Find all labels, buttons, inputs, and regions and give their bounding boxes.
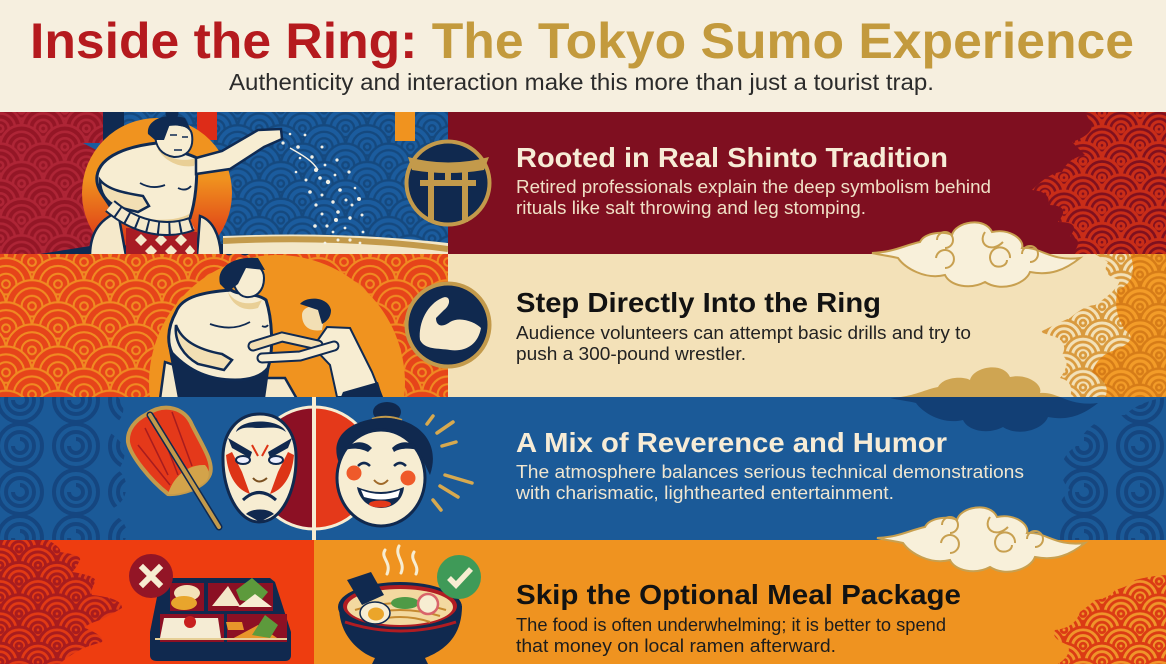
- subtitle: Authenticity and interaction make this more than just a tourist trap.: [229, 69, 934, 95]
- icon: laughing wrestler: [336, 402, 433, 526]
- icon: bento box: [150, 578, 291, 661]
- salt particles: [281, 133, 364, 244]
- icon: flexed bicep: [406, 284, 490, 366]
- text: step into the ring: [516, 322, 971, 364]
- icon: ramen bowl: [338, 572, 462, 664]
- panel: Shinto tradition: [0, 112, 1166, 254]
- heading: Shinto tradition: Rooted in Real Shinto Tradition: [516, 142, 948, 173]
- text: Shinto tradition: [516, 176, 991, 218]
- text: reverence and humor: with charismatic, lighthearted entertainment.: [515, 482, 894, 503]
- icon: laughter lines: [427, 416, 472, 510]
- text: skip the meal package: [516, 614, 946, 656]
- panel: reverence and humor: [0, 397, 1166, 540]
- text: step into the ring: Audience volunteers can attempt basic drills and try to: [516, 322, 971, 343]
- icon: kabuki mask: [223, 414, 296, 522]
- illustration: volunteer pushing sumo wrestler: [149, 254, 405, 397]
- icon: war fan: [128, 408, 219, 527]
- heading: reverence and humor: A Mix of Reverence and Humor: [516, 427, 947, 458]
- text: reverence and humor: [515, 461, 1024, 503]
- heading: skip the meal package: Skip the Optional Meal Package: [516, 579, 961, 610]
- header background: [0, 0, 1166, 112]
- icon: check badge: [437, 555, 481, 599]
- half circle backdrop: [253, 397, 375, 540]
- text: reverence and humor: The atmosphere balances serious technical demonstrations: [516, 461, 1024, 482]
- title: Inside the Ring: The Tokyo Sumo Experience: [30, 13, 1134, 69]
- text: skip the meal package: The food is often underwhelming; it is better to spend: [516, 614, 946, 635]
- text: Shinto tradition: rituals like salt throwing and leg stomping.: [516, 197, 866, 218]
- text: skip the meal package: that money on local ramen afterward.: [516, 635, 836, 656]
- cloud: cream, rows one and two: [872, 222, 1080, 287]
- heading: step into the ring: Step Directly Into the Ring: [516, 287, 881, 318]
- panel: skip the meal package: [0, 540, 1166, 664]
- cloud: cream, rows three and four: [877, 507, 1085, 572]
- text: Shinto tradition: Retired professionals explain the deep symbolism behind: [516, 176, 991, 197]
- icon: cross badge: [129, 554, 173, 598]
- cloud: gold and navy: [890, 367, 1098, 432]
- text: step into the ring: push a 300-pound wrestler.: [516, 343, 746, 364]
- icon: torii gate: [406, 142, 490, 224]
- icon: steam: [384, 546, 417, 574]
- illustration: sumo wrestler throwing salt: [40, 112, 448, 254]
- panel: step into the ring: [0, 254, 1166, 397]
